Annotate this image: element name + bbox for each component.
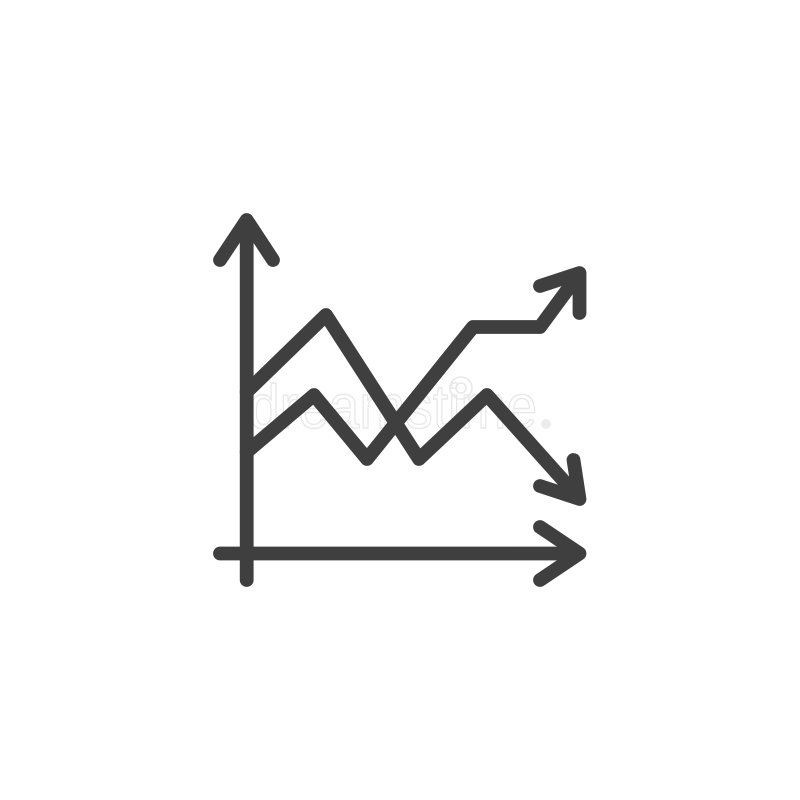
y axis arrow — [220, 220, 273, 580]
falling trend line — [247, 315, 579, 499]
chart strokes — [220, 220, 580, 580]
rising trend line — [247, 273, 579, 459]
watermark: dreamstime — [249, 373, 537, 442]
x axis arrow — [220, 527, 580, 580]
